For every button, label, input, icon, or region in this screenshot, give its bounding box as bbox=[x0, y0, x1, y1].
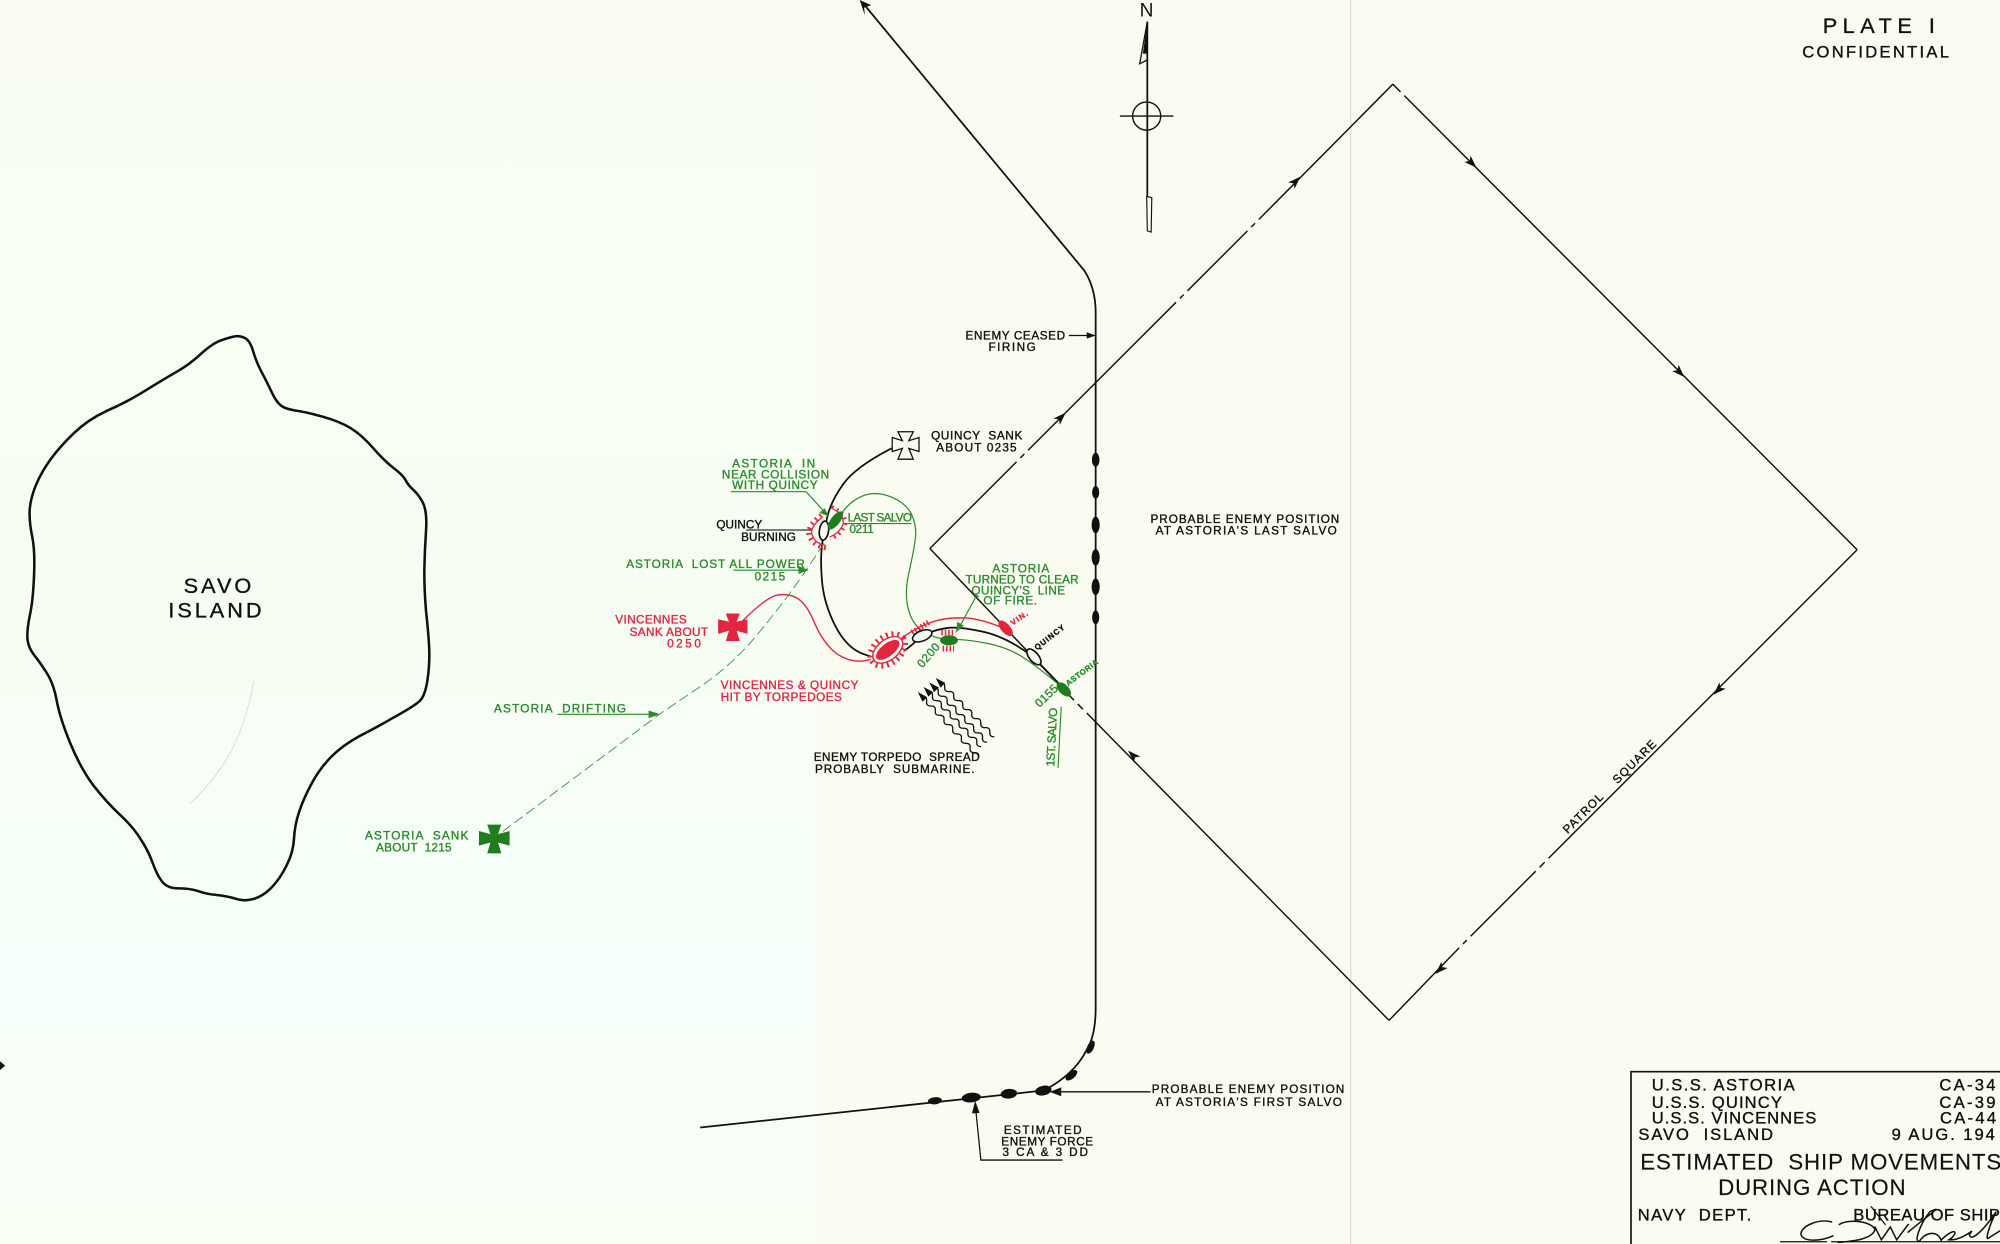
ship list: U.S.S. QUINCY bbox=[1652, 1093, 1782, 1112]
label: Astoria near collision bbox=[722, 457, 829, 517]
label: Vincennes sank: SANK ABOUT bbox=[630, 626, 708, 639]
ship marker: Quincy start bbox=[1024, 647, 1044, 667]
Astoria drifting track bbox=[497, 543, 824, 835]
label: Astoria near collision: NEAR COLLISION bbox=[722, 468, 829, 481]
heading: estimated ship movements during action: DURING ACTION bbox=[1718, 1175, 1906, 1200]
label: Astoria sank: ASTORIA SANK bbox=[365, 829, 469, 842]
label: Astoria turned to clear line of fire bbox=[956, 563, 1079, 633]
ship list: 9 AUG. 194 bbox=[1892, 1125, 1995, 1144]
patrol square course bbox=[930, 84, 1857, 1020]
label: Astoria turned to clear line of fire: OF FIRE. bbox=[983, 595, 1037, 608]
ship list: CA-44 bbox=[1940, 1109, 1996, 1128]
label: Quincy sank: QUINCY SANK bbox=[931, 429, 1022, 442]
icon: Vincennes sinking cross bbox=[718, 614, 747, 641]
icon: north compass: N bbox=[1140, 1, 1153, 22]
label: Astoria ship tag: ASTORIA bbox=[1064, 657, 1100, 688]
label: Astoria near collision: WITH QUINCY bbox=[732, 479, 818, 492]
label: Astoria turned to clear line of fire: QUINCY'S LINE bbox=[971, 584, 1065, 597]
label: Astoria lost all power bbox=[626, 558, 809, 583]
icon: enemy torpedo spread bbox=[915, 676, 997, 760]
callout: estimated enemy force bbox=[972, 1101, 1093, 1160]
callout: estimated enemy force: ESTIMATED bbox=[1004, 1124, 1082, 1137]
label: Quincy burning: QUINCY bbox=[716, 519, 762, 532]
label: 1st salvo: 1ST. SALVO bbox=[1044, 707, 1060, 767]
label: last salvo 0211: LAST SALVO bbox=[848, 512, 912, 525]
callout: probable enemy position at Astoria's last salvo: PROBABLE ENEMY POSITION bbox=[1151, 513, 1339, 526]
island: Savo Island outline bbox=[27, 336, 429, 900]
island name label bbox=[168, 573, 261, 622]
callout: enemy ceased firing: ENEMY CEASED bbox=[966, 329, 1065, 342]
label: torpedo hits bbox=[721, 679, 859, 704]
callout: estimated enemy force: ENEMY FORCE bbox=[1001, 1135, 1093, 1148]
label: Vincennes sank bbox=[615, 614, 708, 650]
signature bbox=[1781, 1207, 2000, 1242]
ship marker: Astoria last salvo bbox=[825, 507, 846, 539]
label: torpedo hits: VINCENNES & QUINCY bbox=[721, 679, 859, 692]
label: Astoria lost all power: ASTORIA LOST ALL POWER bbox=[626, 558, 805, 571]
label: last salvo 0211 bbox=[844, 512, 912, 536]
plate heading: CONFIDENTIAL bbox=[1802, 42, 1949, 61]
icon: Quincy sinking cross bbox=[892, 432, 919, 459]
callout: probable enemy position at Astoria's first salvo bbox=[1050, 1083, 1344, 1109]
label: Vin ship tag: VIN. bbox=[1009, 609, 1030, 627]
ship list bbox=[1638, 1076, 1996, 1144]
patrol square label: PATROL SQUARE bbox=[1561, 738, 1659, 836]
callout: probable enemy position at Astoria's last salvo bbox=[1151, 513, 1339, 537]
callout: probable enemy position at Astoria's first salvo: AT ASTORIA'S FIRST SALVO bbox=[1156, 1096, 1342, 1109]
ship list: SAVO ISLAND bbox=[1638, 1125, 1773, 1144]
ship marker: Astoria first salvo bbox=[1054, 680, 1074, 699]
heading: estimated ship movements during action: ESTIMATED SHIP MOVEMENTS bbox=[1640, 1149, 2000, 1174]
label: Astoria near collision: ASTORIA IN bbox=[732, 457, 815, 470]
ship list: U.S.S. ASTORIA bbox=[1652, 1076, 1796, 1095]
label: Astoria turned to clear line of fire: TURNED TO CLEAR bbox=[966, 574, 1079, 587]
label: 0155 time: 0155 bbox=[1033, 682, 1061, 710]
ship marker: Quincy hit with fire bbox=[911, 622, 934, 644]
ship marker: Astoria at 0200 bbox=[940, 633, 958, 649]
ship marker: Vincennes start bbox=[996, 618, 1015, 638]
heading: estimated ship movements during action bbox=[1640, 1149, 2000, 1200]
label: last salvo 0211: 0211 bbox=[849, 523, 874, 536]
plate heading: PLATE I bbox=[1823, 13, 1935, 38]
enemy ship markers bbox=[928, 453, 1100, 1105]
department lines: BUREAU OF SHIP bbox=[1853, 1206, 2000, 1225]
label: Vincennes sank: VINCENNES bbox=[615, 614, 687, 627]
Vincennes track bbox=[742, 595, 1005, 661]
callout: estimated enemy force: 3 CA & 3 DD bbox=[1003, 1146, 1088, 1159]
ship marker: Vincennes hit and burning bbox=[864, 627, 912, 673]
label: Quincy sank bbox=[931, 429, 1022, 455]
Astoria track bbox=[835, 493, 1064, 689]
department lines bbox=[1638, 1206, 2000, 1225]
ship list: U.S.S. VINCENNES bbox=[1652, 1109, 1816, 1128]
label: Astoria sank: ABOUT 1215 bbox=[376, 842, 452, 855]
label: enemy torpedo spread: ENEMY TORPEDO SPREAD bbox=[814, 751, 980, 764]
label: Vincennes sank: 0250 bbox=[667, 637, 701, 650]
label: enemy torpedo spread: PROBABLY SUBMARINE. bbox=[815, 763, 974, 776]
label: Astoria sank bbox=[365, 829, 469, 855]
label: Quincy burning: BURNING bbox=[741, 531, 796, 544]
callout: enemy ceased firing: FIRING bbox=[989, 341, 1036, 354]
enemy force track bbox=[700, 0, 1100, 1128]
island name label: ISLAND bbox=[168, 597, 261, 622]
label: torpedo hits: HIT BY TORPEDOES bbox=[721, 691, 842, 704]
plate heading bbox=[1802, 13, 1949, 61]
panel: title block bbox=[1631, 1072, 2000, 1244]
island name label: SAVO bbox=[184, 573, 251, 598]
label: Quincy ship tag: QUINCY bbox=[1033, 623, 1067, 652]
department lines: NAVY DEPT. bbox=[1638, 1206, 1751, 1225]
ship list: CA-39 bbox=[1939, 1093, 1996, 1112]
Quincy track bbox=[821, 448, 1064, 689]
callout: probable enemy position at Astoria's first salvo: PROBABLE ENEMY POSITION bbox=[1152, 1083, 1344, 1096]
label: Astoria drifting bbox=[494, 702, 660, 718]
label: enemy torpedo spread bbox=[814, 751, 980, 776]
callout: probable enemy position at Astoria's last salvo: AT ASTORIA'S LAST SALVO bbox=[1156, 524, 1337, 537]
label: Quincy burning bbox=[716, 519, 811, 544]
callout: enemy ceased firing bbox=[966, 329, 1096, 354]
label: Astoria lost all power: 0215 bbox=[755, 570, 786, 583]
label: Astoria turned to clear line of fire: ASTORIA bbox=[992, 563, 1049, 576]
ship list: CA-34 bbox=[1939, 1076, 1996, 1095]
icon: north compass bbox=[1120, 1, 1173, 232]
label: Quincy sank: ABOUT 0235 bbox=[936, 442, 1017, 455]
arrow: patrol direction markers bbox=[1054, 156, 1726, 977]
label: Astoria drifting: ASTORIA DRIFTING bbox=[494, 702, 626, 715]
icon: Astoria sinking cross bbox=[479, 825, 510, 853]
ship marker: Quincy burning bbox=[809, 515, 830, 548]
label: 0200 time: 0200 bbox=[915, 640, 943, 670]
